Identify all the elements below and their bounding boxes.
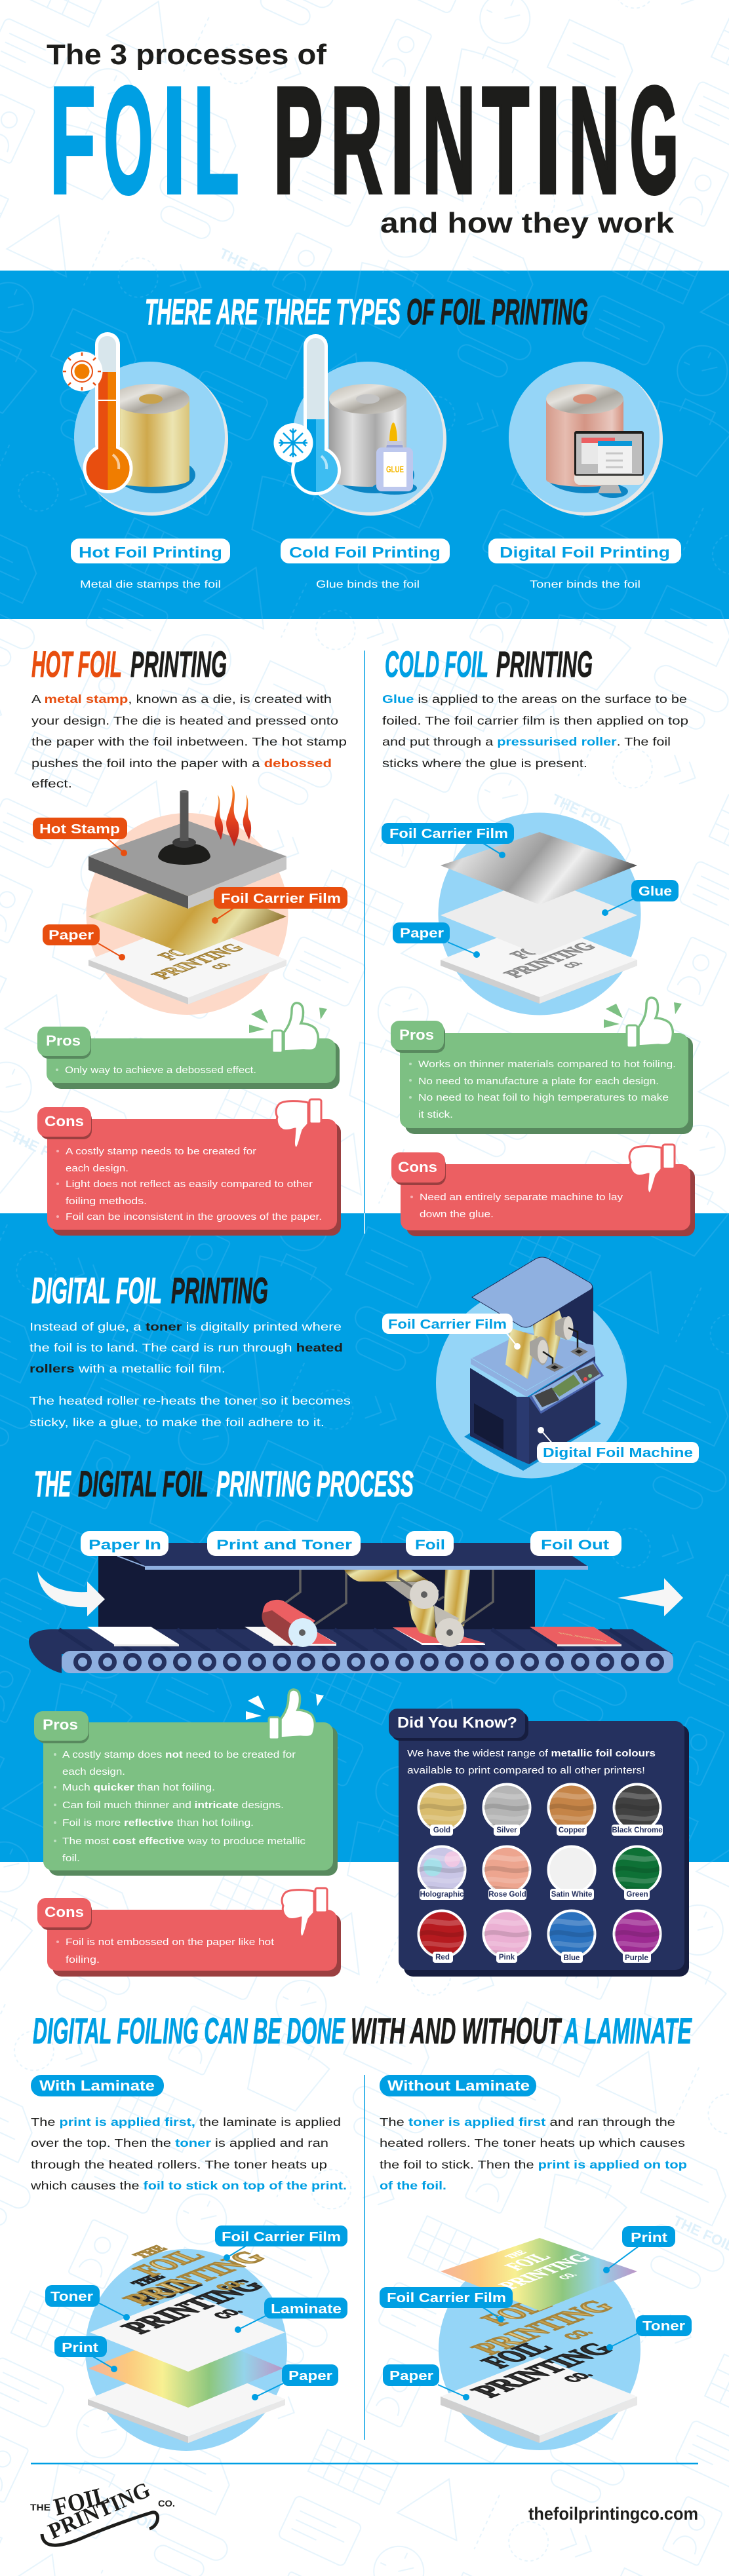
body text: the paper with the foil inbetween. The hot stamp — [31, 735, 347, 748]
body text: The print is applied first, the laminate is applied — [31, 2115, 341, 2129]
panel: without laminate — [380, 2075, 692, 2450]
white print logo: CO. — [555, 2271, 580, 2281]
swatch: black chrome — [612, 1785, 663, 1836]
icon: computer monitor — [574, 431, 644, 493]
pros box: digital: A costly stamp does not need to be created for — [62, 1750, 296, 1760]
label: foil carrier film: Foil Carrier Film — [389, 827, 508, 841]
icon: glue bottle: GLUE — [386, 464, 404, 474]
foil ribbons and rollers — [344, 1570, 493, 1647]
sheet: print and toner — [245, 1627, 336, 1646]
body text — [380, 2115, 687, 2192]
pill: cold foil printing: Cold Foil Printing — [289, 544, 441, 561]
body text — [31, 692, 347, 790]
label: toner — [606, 2315, 692, 2351]
toner logo: PRINTING — [463, 2339, 621, 2400]
label: foil carrier film — [380, 2287, 513, 2322]
cons box: digital: foiling. — [66, 1955, 100, 1965]
icon: silver foil roll — [329, 384, 406, 487]
label: toner: Toner — [642, 2319, 685, 2334]
sheet: foil stage — [393, 1627, 485, 1645]
pros box: digital: each design. — [62, 1767, 125, 1777]
label: foil carrier film: Foil Carrier Film — [388, 1317, 507, 1332]
label: foil carrier film — [215, 2226, 347, 2261]
label: toner: Toner — [50, 2290, 93, 2304]
footer rule — [31, 2463, 698, 2465]
swatch: gold — [418, 1785, 465, 1836]
pros box: digital — [34, 1690, 338, 1876]
pros box: it stick. — [418, 1110, 453, 1120]
swatch: satin white: Satin White — [551, 1891, 592, 1899]
pill: digital foil printing — [488, 539, 681, 563]
panel: with laminate — [30, 2075, 347, 2451]
heading: PRINTING — [130, 643, 227, 685]
body text: The heated roller re-heats the toner so it becomes — [30, 1394, 351, 1407]
toner logo: FOIL — [123, 2274, 210, 2307]
title: L — [193, 56, 239, 225]
body text: foiled. The foil carrier film is then applied on top — [382, 714, 688, 727]
background: white and blue bands: THE FOIL — [217, 245, 283, 288]
panel: cold foil printing — [382, 643, 695, 1236]
toner logo — [66, 2258, 290, 2344]
title line three: and how they work — [380, 207, 675, 239]
toner logo: FOIL — [473, 2338, 560, 2371]
paper layer — [88, 2358, 285, 2443]
body text: pushes the foil into the paper with a debossed — [31, 757, 332, 770]
pill: hot foil printing: Hot Foil Printing — [79, 544, 222, 561]
title word FOIL: F — [50, 56, 96, 225]
logo: the foil printing co: FOIL — [51, 2482, 111, 2522]
pros box: Works on thinner materials compared to hot foiling. — [418, 1059, 676, 1070]
label: hot stamp: Hot Stamp — [39, 822, 120, 837]
print layer — [441, 2238, 637, 2311]
label: foil — [406, 1531, 454, 1556]
cons box: digital: Cons — [45, 1904, 84, 1920]
label: paper: Paper — [389, 2369, 433, 2383]
swatch: silver — [484, 1785, 530, 1836]
glue layer — [441, 877, 637, 955]
foil logo: CO. — [211, 2278, 248, 2292]
pros box: digital: foil. — [62, 1853, 80, 1864]
machine deck — [472, 1332, 595, 1390]
illustration: layers without laminate — [380, 2226, 692, 2450]
icon: thumbs down — [282, 1888, 327, 1937]
icon: snowflake badge — [274, 423, 313, 463]
cons box: foiling methods. — [66, 1196, 147, 1207]
caption: Toner binds the foil — [530, 579, 640, 590]
icon: thumbs down — [276, 1099, 321, 1148]
sheet: foil out: FOIL PRINTING — [557, 1631, 608, 1643]
label: toner — [45, 2285, 130, 2320]
pill: Without Laminate — [387, 2077, 530, 2094]
toner roller — [262, 1570, 346, 1647]
cons box — [391, 1145, 695, 1236]
intro text — [407, 1749, 656, 1776]
label: laminate: Laminate — [271, 2302, 342, 2317]
control panel — [529, 1360, 604, 1414]
swatch: silver: Silver — [496, 1827, 517, 1834]
heading: PRINTING — [496, 643, 593, 685]
pros box: digital: Pros — [43, 1716, 78, 1733]
pill: digital foil printing: Digital Foil Printing — [500, 544, 670, 561]
label: print — [54, 2336, 117, 2372]
swatch: rose gold: Rose Gold — [488, 1891, 526, 1899]
illustration: digital foil machine — [382, 1257, 699, 1478]
icon: thumbs down — [629, 1145, 675, 1194]
pros box: digital: Much quicker than hot foiling. — [62, 1783, 215, 1793]
body text: through the heated rollers. The toner heats up — [31, 2158, 327, 2171]
pill: With Laminate — [39, 2077, 155, 2094]
background: white and blue bands: THE FOIL — [96, 2493, 162, 2535]
title word PRINTING: I — [389, 56, 415, 225]
website address: thefoilprintingco.com — [528, 2504, 698, 2524]
swatch: copper — [548, 1785, 595, 1836]
diagram: conveyor process — [29, 1531, 683, 1673]
toner logo: CO. — [559, 2370, 597, 2384]
title word FOIL: I — [163, 56, 186, 225]
label: paper: Paper — [400, 926, 444, 941]
cons box: digital: Foil is not embossed on the paper like hot — [66, 1937, 274, 1948]
icon: thumbs up — [604, 998, 682, 1048]
sheet: foil out — [530, 1627, 621, 1646]
cons box: Cons — [45, 1113, 84, 1129]
pill — [31, 2075, 164, 2096]
label: paper in: Paper In — [89, 1538, 161, 1553]
column divider — [364, 651, 365, 1234]
panel title: Did You Know? — [397, 1714, 517, 1731]
logo foil on paper: CO. — [208, 961, 233, 970]
white print logo: FOIL — [500, 2251, 557, 2273]
caption: Glue binds the foil — [316, 579, 420, 590]
title word PRINTING: I — [535, 56, 561, 225]
title word PRINTING: R — [330, 56, 383, 225]
panel: hot foil type — [63, 332, 230, 590]
silver foil sheet — [441, 832, 637, 905]
heading: with and without laminate: WITH AND WITHOUT — [351, 2010, 562, 2051]
heading: digital process: DIGITAL FOIL — [78, 1463, 208, 1504]
pros box — [391, 998, 693, 1134]
machine body — [470, 1352, 595, 1464]
panel: digital foil type — [488, 362, 681, 590]
white print logo — [463, 2240, 608, 2296]
title line one: The 3 processes of — [47, 39, 326, 71]
foil logo: THE — [130, 2244, 171, 2260]
arrow: paper in — [37, 1571, 105, 1616]
logo: the foil printing co: PRINTING — [45, 2478, 154, 2544]
title word PRINTING: P — [273, 56, 323, 225]
icon: sun badge — [63, 351, 102, 392]
label: print — [603, 2226, 675, 2273]
cons box — [37, 1099, 341, 1236]
paper layer — [89, 921, 286, 1004]
pros box: No need to manufacture a plate for each design. — [418, 1076, 659, 1087]
toner logo: PRINTING — [113, 2276, 271, 2337]
logo: the foil printing co: THE — [30, 2502, 50, 2512]
pros box: digital: The most cost effective way to produce metallic — [62, 1836, 305, 1847]
swatch: green: Green — [626, 1891, 648, 1899]
logo foil on paper: PRINTING — [147, 941, 250, 981]
label: paper: Paper — [288, 2369, 332, 2383]
label: foil carrier film: Foil Carrier Film — [221, 892, 341, 906]
illustration: layers with laminate — [45, 2226, 347, 2451]
swatch: holographic — [418, 1846, 465, 1900]
label: print: Print — [62, 2341, 98, 2355]
pros box: No need to heat foil to high temperatures to make — [418, 1093, 669, 1103]
swatch: black chrome: Black Chrome — [612, 1827, 663, 1834]
white print logo: PRINTING — [494, 2252, 597, 2292]
icon: copper foil roll — [546, 384, 623, 487]
body text: sticky, like a glue, to make the foil adhere to it. — [30, 1416, 325, 1429]
body text: heated rollers. The toner heats up which causes — [380, 2136, 685, 2150]
cons box: Foil can be inconsistent in the grooves of the paper. — [66, 1212, 322, 1222]
body text: A metal stamp , known as a die, is created with — [31, 692, 332, 706]
label: foil carrier film: Foil Carrier Film — [387, 2291, 506, 2305]
swatch: red — [418, 1910, 465, 1963]
print layer — [89, 2329, 283, 2408]
swatch: copper: Copper — [559, 1827, 585, 1834]
column divider — [364, 2075, 365, 2440]
heading: HOT FOIL — [31, 643, 122, 685]
toner logo: THE — [128, 2272, 169, 2288]
dark back panel — [98, 1556, 535, 1631]
foil logo — [68, 2229, 292, 2316]
label: hot stamp — [33, 818, 127, 856]
heading: DIGITAL FOIL — [31, 1270, 162, 1311]
icon: glue bottle — [372, 423, 417, 495]
heat flames — [215, 785, 251, 846]
body text — [30, 1320, 351, 1429]
conveyor belt — [29, 1629, 673, 1673]
toner logo: CO. — [209, 2306, 246, 2320]
body text: the foil is to land. The card is run through heated — [30, 1341, 343, 1354]
swatch: rose gold — [484, 1846, 530, 1900]
cons box: Light does not reflect as easily compared to other — [66, 1179, 313, 1190]
label: foil carrier film — [382, 1314, 521, 1350]
sheet: paper in — [87, 1627, 179, 1646]
icon: cold thermometer — [291, 334, 341, 495]
cons box: A costly stamp needs to be created for — [66, 1146, 256, 1157]
body text: over the top. Then the toner is applied and ran — [31, 2136, 328, 2150]
heading: three types: OF FOIL PRINTING — [406, 291, 588, 332]
stamp handle — [158, 790, 210, 865]
title — [47, 39, 679, 239]
pros box: Pros — [399, 1027, 434, 1043]
panel: digital foil printing — [30, 1257, 699, 1478]
title word FOIL: O — [104, 56, 153, 225]
label: digital foil machine: Digital Foil Machine — [543, 1446, 693, 1460]
pros box — [37, 1003, 340, 1089]
foil rolls — [505, 1310, 588, 1379]
illustration: hot stamp layers — [33, 785, 347, 1015]
cons box: down the glue. — [420, 1209, 494, 1220]
laminate layer — [90, 2293, 285, 2372]
top band — [116, 1543, 588, 1570]
heading: digital process: THE — [34, 1463, 71, 1504]
cons box: each design. — [66, 1164, 128, 1174]
label: print and toner — [207, 1531, 361, 1556]
heading: COLD FOIL — [385, 643, 488, 685]
cons box: Cons — [398, 1159, 437, 1175]
body text: sticks where the glue is present. — [382, 757, 587, 770]
swatch: red: Red — [435, 1954, 450, 1961]
swatch: green — [614, 1846, 661, 1900]
icon: thumbs up — [246, 1690, 324, 1739]
body text: of the foil. — [380, 2179, 446, 2192]
foil logo: CO. — [559, 2327, 597, 2341]
body text: and put through a pressurised roller . The foil — [382, 735, 671, 748]
label: glue: Glue — [639, 884, 672, 899]
body text: which causes the foil to stick on top of the print. — [30, 2179, 347, 2192]
foil logo: FOIL — [125, 2246, 212, 2279]
label: foil out: Foil Out — [541, 1538, 609, 1553]
swatch: pink — [484, 1910, 530, 1963]
swatch: purple: Purple — [625, 1954, 648, 1962]
pros box: digital: Foil is more reflective than hot foiling. — [62, 1818, 254, 1828]
pros box: Only way to achieve a debossed effect. — [65, 1065, 256, 1076]
machine back panel — [526, 1287, 593, 1348]
label: foil carrier film — [382, 823, 514, 858]
body text — [382, 692, 688, 770]
intro text: We have the widest range of metallic foil colours — [407, 1749, 656, 1759]
heading: PRINTING — [171, 1270, 268, 1311]
swatch: holographic: Holographic — [420, 1891, 464, 1899]
logo on paper: PRINTING — [499, 940, 602, 980]
logo: the foil printing co: CO. — [158, 2498, 175, 2509]
body text: Glue is applied to the areas on the surface to be — [382, 692, 687, 706]
body text: The toner is applied first and ran through the — [380, 2115, 675, 2129]
icon: hot thermometer — [83, 332, 132, 493]
body text: Instead of glue, a toner is digitally printed where — [30, 1320, 342, 1333]
body text: the foil to stick. Then the print is applied on top — [380, 2158, 687, 2171]
heading: three types: THERE ARE THREE TYPES — [145, 291, 401, 332]
icon: thumbs up — [249, 1003, 327, 1053]
swatch: purple — [614, 1910, 661, 1963]
heading: with and without laminate: DIGITAL FOILING CAN BE DONE — [33, 2010, 345, 2051]
label: foil out — [530, 1531, 621, 1556]
title word PRINTING: N — [422, 56, 476, 225]
label: paper — [393, 922, 480, 958]
panel: hot foil printing — [31, 643, 347, 1236]
background: white and blue bands: THE FOIL — [549, 791, 616, 833]
intro text: available to print compared to all other printers! — [407, 1766, 645, 1776]
body text: effect. — [31, 777, 72, 790]
label: laminate — [235, 2298, 347, 2333]
logo on paper: FOIL — [505, 939, 562, 961]
heading: digital process: PRINTING PROCESS — [216, 1463, 414, 1504]
swatch: gold: Gold — [433, 1827, 450, 1834]
machine top plate — [472, 1257, 593, 1327]
paper layer — [441, 921, 637, 1004]
title word PRINTING: N — [568, 56, 620, 225]
background: white and blue bands: THE FOIL — [9, 1128, 75, 1171]
label: glue — [602, 880, 679, 916]
logo foil on paper: FOIL — [153, 941, 210, 962]
swatch: pink: Pink — [499, 1954, 515, 1961]
label: digital foil machine — [537, 1427, 699, 1463]
pros box: Pros — [46, 1032, 81, 1049]
label: paper: Paper — [49, 928, 94, 943]
stamp plate — [89, 821, 286, 909]
label: paper — [383, 2364, 469, 2400]
swatch: satin white — [548, 1846, 595, 1900]
pill: cold foil printing — [281, 539, 450, 563]
pill: hot foil printing — [71, 539, 230, 563]
gold foil sheet — [89, 877, 286, 955]
label: foil: Foil — [415, 1538, 445, 1553]
body text: rollers with a metallic foil film. — [30, 1362, 226, 1375]
caption: Metal die stamps the foil — [80, 579, 221, 590]
panel: cold foil type — [274, 334, 450, 590]
label: print: Print — [631, 2231, 667, 2245]
white print logo: THE — [503, 2249, 530, 2260]
pros box: digital: Can foil much thinner and intricate designs. — [62, 1800, 284, 1811]
foil logo: PRINTING — [115, 2248, 273, 2309]
title word PRINTING: T — [482, 56, 529, 225]
label: foil carrier film: Foil Carrier Film — [222, 2230, 341, 2245]
swatch: blue: Blue — [564, 1954, 580, 1962]
foil logo: FOIL — [473, 2295, 560, 2328]
label: paper — [43, 924, 125, 960]
illustration: cold foil layers — [382, 812, 679, 1015]
body text: your design. The die is heated and pressed onto — [31, 714, 338, 727]
panel: did you know — [389, 1709, 689, 1977]
label: paper in — [81, 1531, 168, 1556]
label: paper — [252, 2364, 338, 2400]
logo on paper: CO. — [561, 960, 585, 969]
foil logo: PRINTING — [463, 2297, 621, 2358]
pill — [380, 2075, 536, 2096]
cons box: digital — [37, 1888, 341, 1977]
swatch: blue — [548, 1910, 595, 1963]
label: foil carrier film — [212, 887, 347, 924]
cons box: Need an entirely separate machine to lay — [420, 1192, 623, 1203]
icon: gold foil roll — [112, 384, 189, 487]
label: print and toner: Print and Toner — [216, 1538, 352, 1553]
arrow: foil out — [618, 1578, 683, 1616]
paper layer — [441, 2357, 637, 2443]
body text — [30, 2115, 347, 2192]
